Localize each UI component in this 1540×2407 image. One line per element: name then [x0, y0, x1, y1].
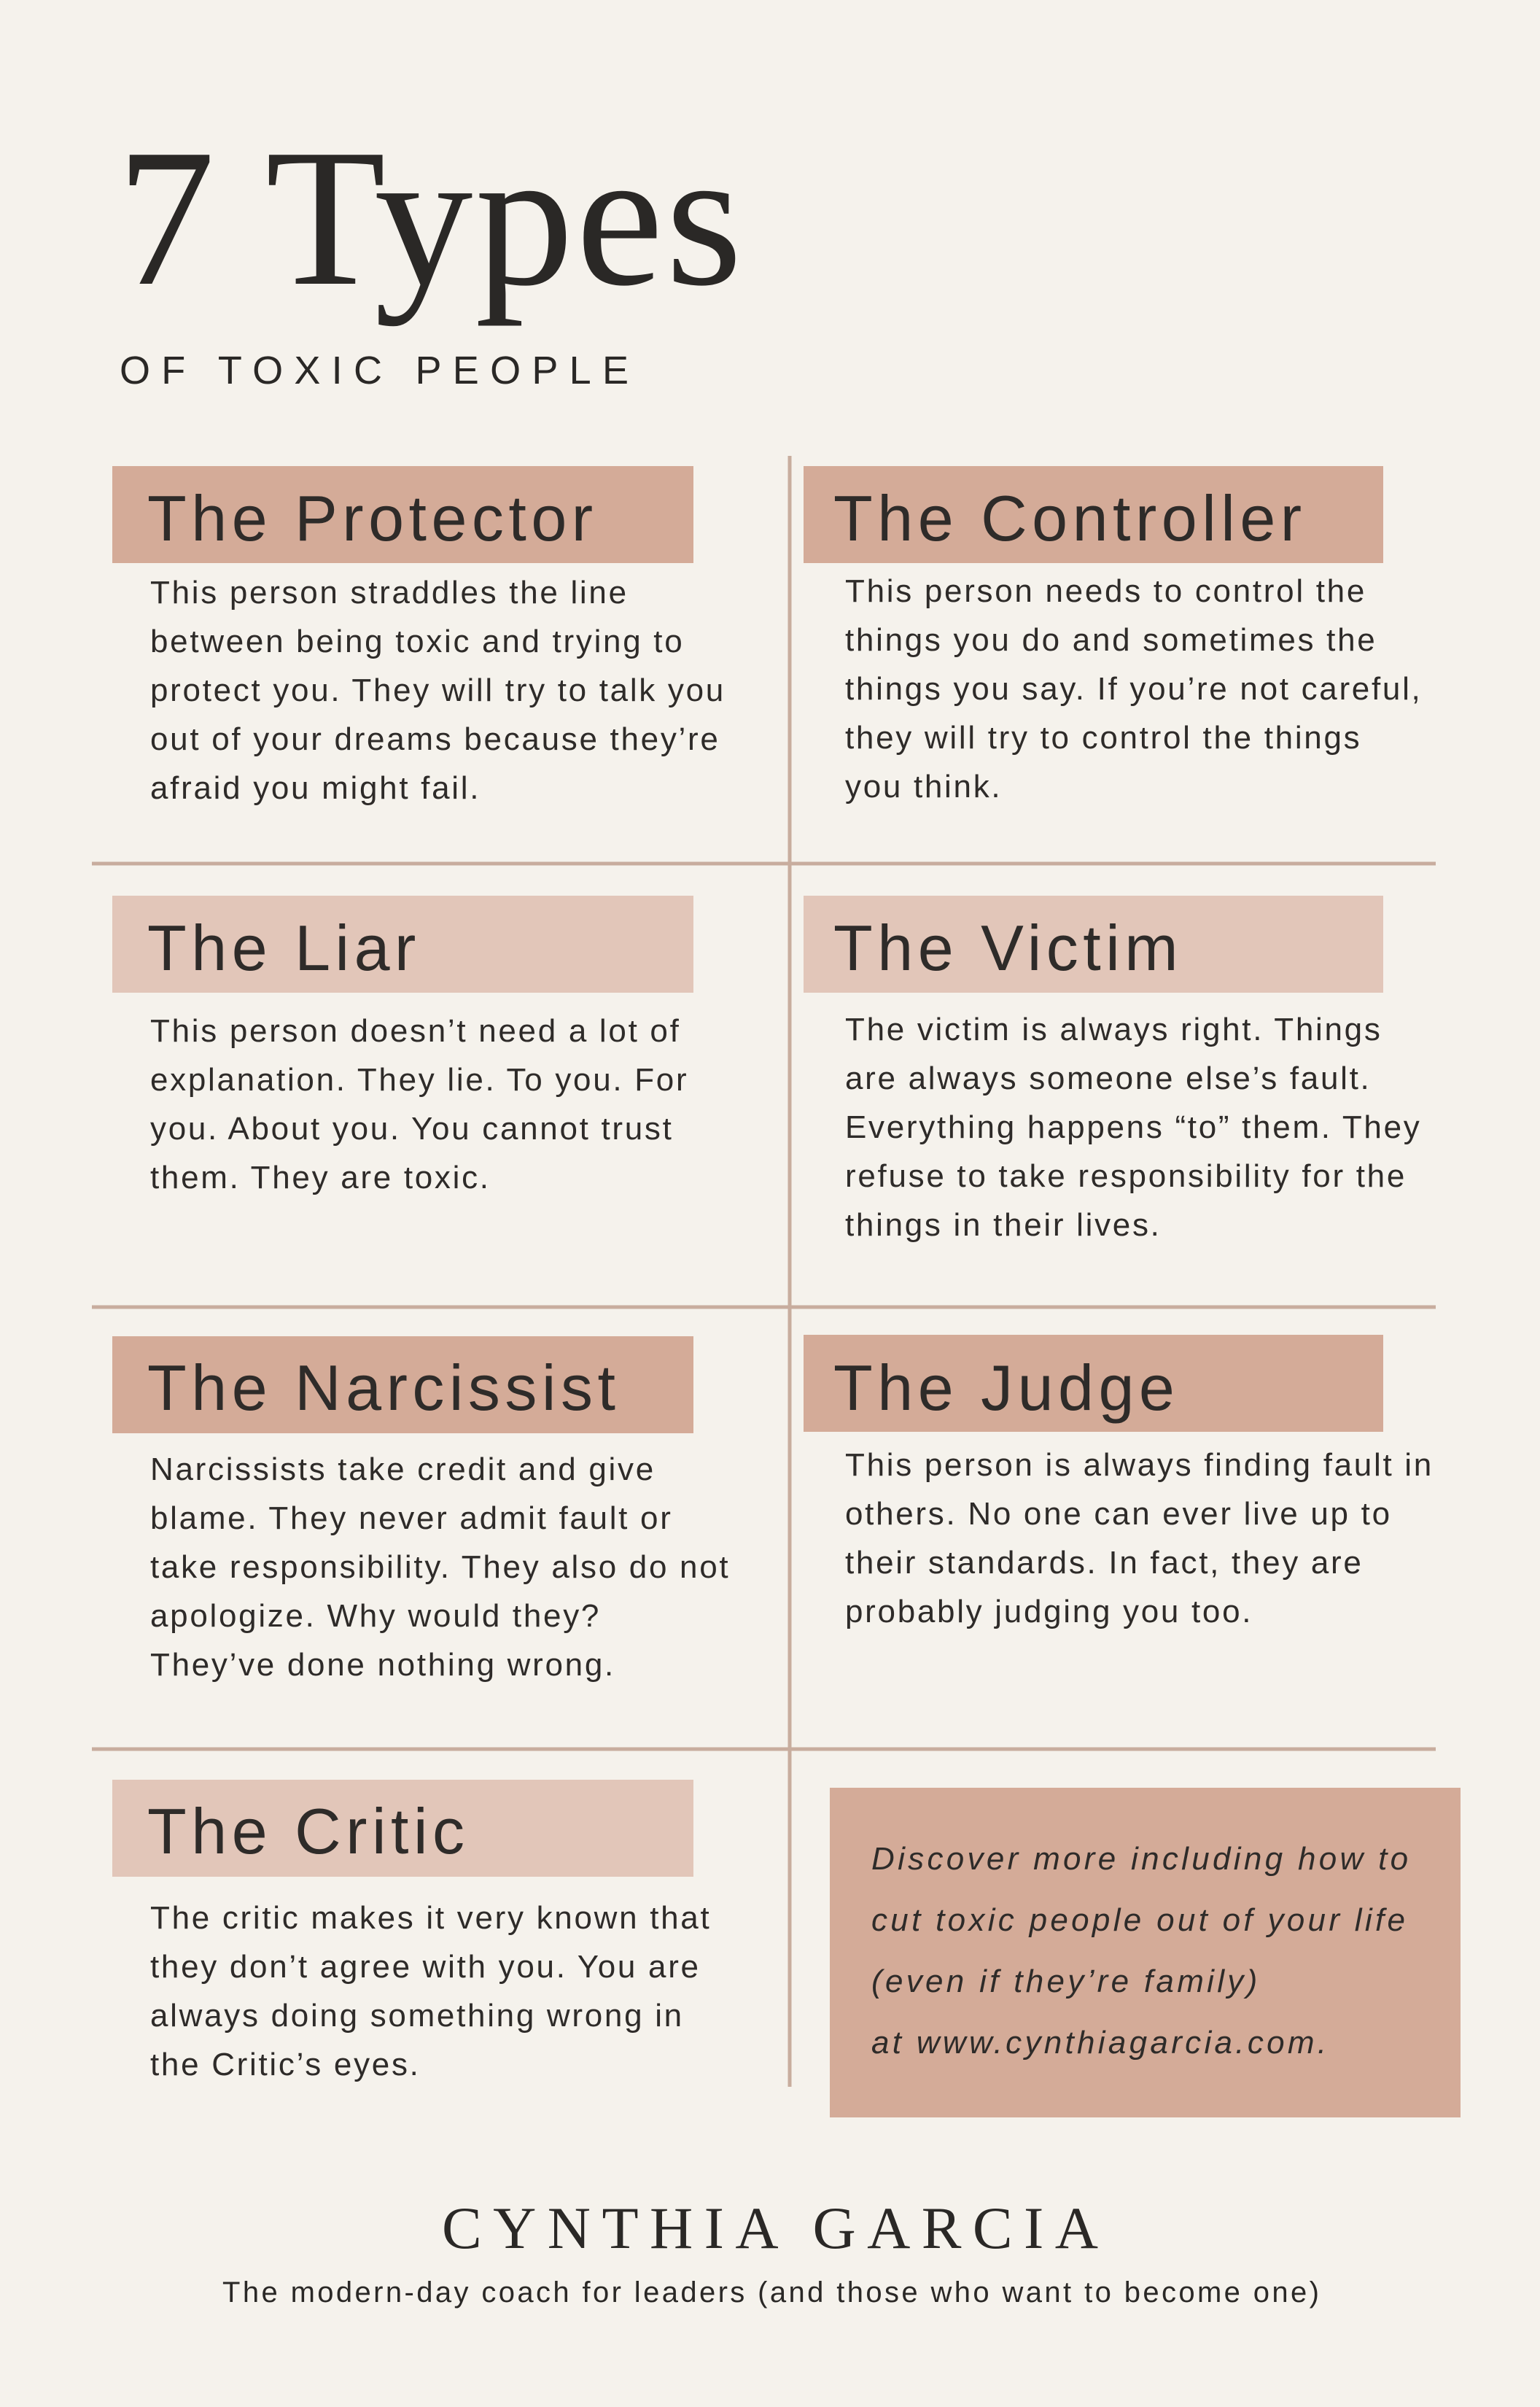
panel: The Narcissist: blame. They never admit fault or — [150, 1500, 673, 1536]
panel: The Liar: explanation. They lie. To you. For — [150, 1062, 688, 1098]
panel: The Critic: they don’t agree with you. You are — [150, 1949, 701, 1985]
panel: The Protector: The Protector — [147, 482, 598, 554]
panel: The Victim: refuse to take responsibility for the — [845, 1158, 1407, 1194]
callout: website: Discover more including how to — [871, 1841, 1411, 1877]
title: 7 Types — [117, 109, 742, 327]
panel: The Controller: This person needs to control the — [845, 573, 1366, 609]
footer: CYNTHIA GARCIA — [442, 2195, 1098, 2261]
panel: The Narcissist: apologize. Why would they? — [150, 1598, 601, 1634]
panel: The Controller: you think. — [845, 769, 1002, 805]
panel: The Liar: The Liar — [147, 912, 421, 984]
panel: The Liar: This person doesn’t need a lot of — [150, 1013, 681, 1049]
panel: The Judge: This person is always finding fault in — [845, 1447, 1434, 1483]
panel: The Controller: they will try to control the things — [845, 720, 1361, 756]
panel: The Victim — [804, 896, 1421, 1243]
panel: The Narcissist — [112, 1336, 730, 1683]
panel: The Controller: things you do and sometimes the — [845, 622, 1377, 658]
panel: The Judge: their standards. In fact, they are — [845, 1545, 1364, 1581]
panel: The Controller: things you say. If you’re not careful, — [845, 671, 1422, 707]
panel: The Judge — [804, 1335, 1434, 1629]
callout: website — [830, 1788, 1461, 2117]
panel: The Narcissist: They’ve done nothing wrong. — [150, 1647, 615, 1683]
panel: The Judge: others. No one can ever live up to — [845, 1496, 1392, 1532]
panel: The Narcissist: take responsibility. They also do not — [150, 1549, 730, 1585]
panel: The Judge: probably judging you too. — [845, 1594, 1253, 1629]
panel: The Protector: afraid you might fail. — [150, 770, 481, 806]
footer: The modern-day coach for leaders (and those who want to become one) — [222, 2276, 1319, 2309]
panel: The Critic: The critic makes it very known that — [150, 1900, 711, 1936]
panel: The Protector: protect you. They will try to talk you — [150, 673, 726, 708]
panel: The Narcissist: The Narcissist — [147, 1352, 620, 1424]
panel: The Protector: out of your dreams because they’re — [150, 721, 720, 757]
panel: The Liar: you. About you. You cannot trust — [150, 1111, 674, 1147]
panel: The Victim: The Victim — [833, 912, 1183, 984]
panel: The Protector — [112, 466, 726, 806]
panel: The Controller: The Controller — [833, 482, 1307, 554]
panel: The Victim: The victim is always right. Things — [845, 1012, 1382, 1047]
panel: The Protector: between being toxic and trying to — [150, 624, 684, 659]
callout: website: (even if they’re family) — [871, 1964, 1261, 1999]
panel: The Liar — [112, 896, 693, 1195]
title: OF TOXIC PEOPLE — [120, 349, 629, 392]
panel: The Critic: The Critic — [147, 1795, 470, 1867]
panel: The Controller — [804, 466, 1422, 805]
panel: The Victim: Everything happens “to” them. They — [845, 1109, 1421, 1145]
panel: The Judge: The Judge — [833, 1352, 1179, 1424]
callout: website: cut toxic people out of your life — [871, 1902, 1408, 1938]
callout: website: at www.cynthiagarcia.com. — [871, 2025, 1329, 2061]
panel: The Liar: them. They are toxic. — [150, 1160, 491, 1195]
panel: The Critic: always doing something wrong in — [150, 1998, 684, 2034]
panel: The Victim: are always someone else’s fault. — [845, 1061, 1371, 1096]
panel: The Narcissist: Narcissists take credit and give — [150, 1451, 656, 1487]
panel: The Victim: things in their lives. — [845, 1207, 1162, 1243]
footer — [222, 2195, 1319, 2309]
panel: The Critic — [112, 1780, 711, 2082]
panel: The Protector: This person straddles the line — [150, 575, 629, 611]
panel: The Critic: the Critic’s eyes. — [150, 2047, 421, 2082]
